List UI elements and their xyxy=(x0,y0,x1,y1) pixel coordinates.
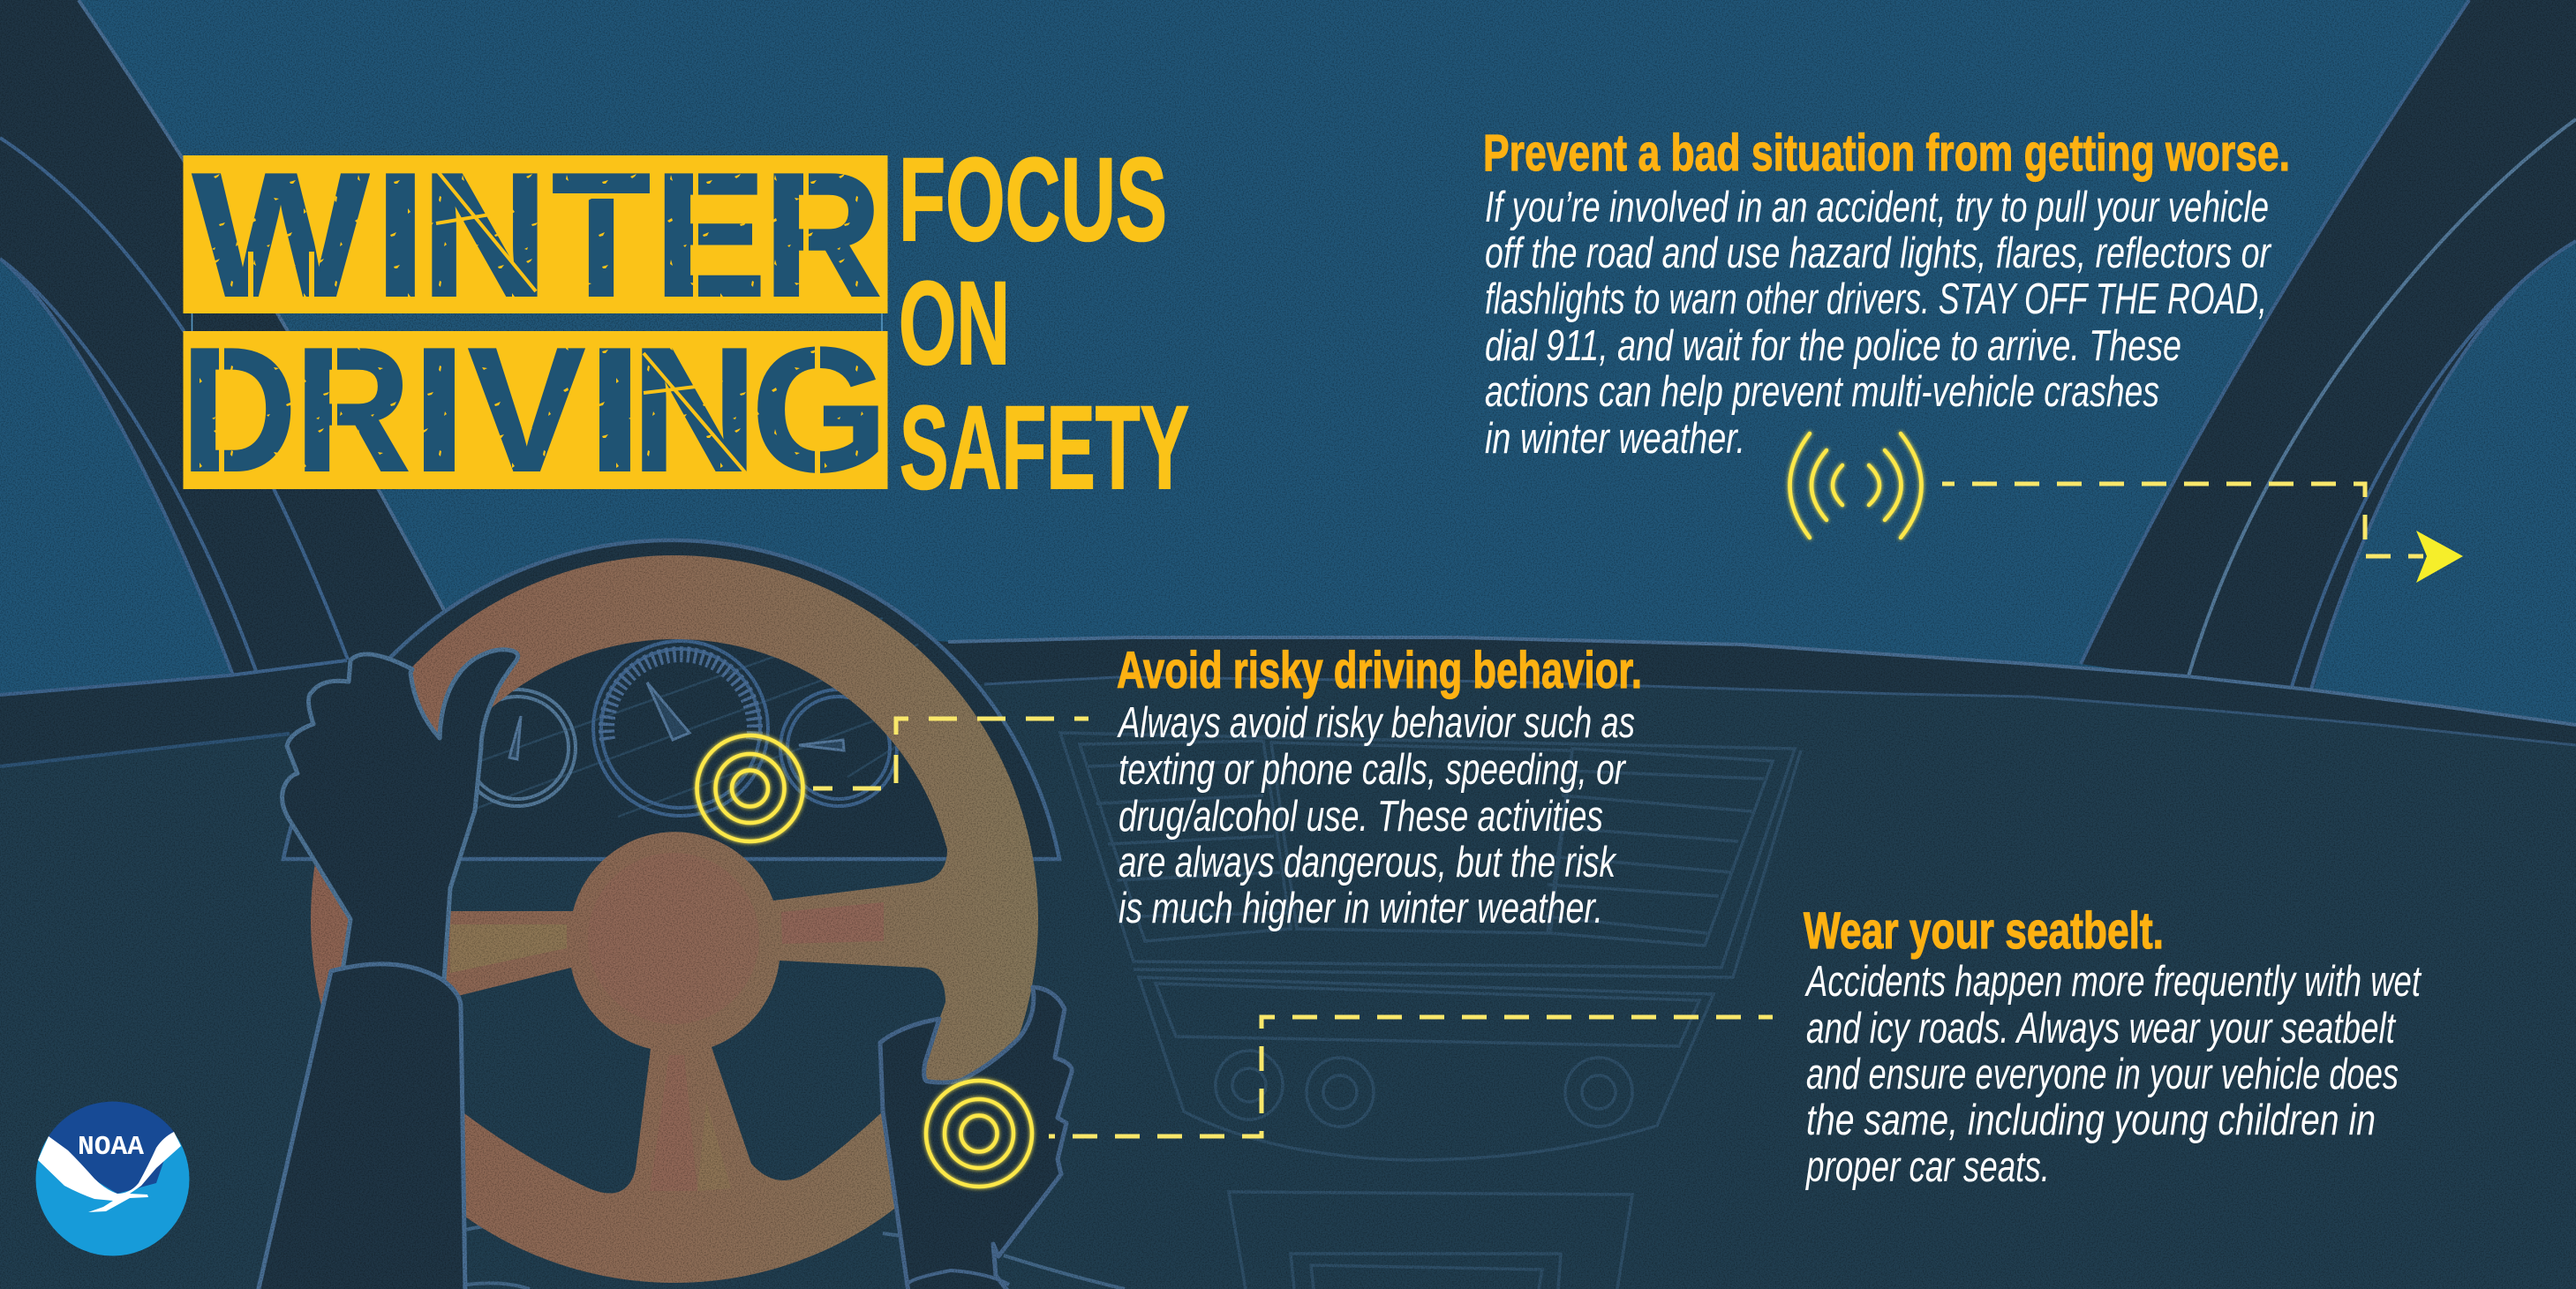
bottom spoke accent left xyxy=(650,1055,697,1191)
left hand xyxy=(282,650,518,980)
logo bird xyxy=(38,1132,181,1212)
right gauge xyxy=(780,690,897,806)
text block: wear your seatbelt xyxy=(1804,902,2422,1191)
text block: avoid risky driving behavior: drug/alcohol use. These activities xyxy=(1119,793,1603,840)
text block: wear your seatbelt: and icy roads. Always wear your seatbelt xyxy=(1806,1005,2397,1052)
title plate: WINTER: T xyxy=(552,137,651,334)
title: FOCUS ON SAFETY: SAFETY xyxy=(900,382,1189,514)
text block: wear your seatbelt: proper car seats. xyxy=(1804,1143,2050,1191)
title plate: DRIVING: I xyxy=(411,312,467,509)
panel: dashboard xyxy=(0,618,2576,1289)
text block: avoid risky driving behavior: Always avoid risky behavior such as xyxy=(1117,699,1635,747)
text block: avoid risky driving behavior: is much higher in winter weather. xyxy=(1119,885,1603,932)
arrow head xyxy=(2416,531,2463,583)
text block: avoid risky driving behavior xyxy=(1117,642,1642,932)
knob 2 xyxy=(1307,1058,1374,1127)
title plate: DRIVING: N xyxy=(631,312,757,509)
text block: prevent a bad situation: If you’re involved in an accident, try to pull your vehicle xyxy=(1485,184,2269,231)
panel: gauges xyxy=(459,618,936,817)
text block: prevent a bad situation: dial 911, and wait for the police to arrive. These xyxy=(1485,322,2181,370)
vent: center xyxy=(1271,742,1572,933)
knob 3 xyxy=(1565,1058,1632,1127)
text block: prevent a bad situation xyxy=(1483,124,2290,463)
right hand cuff xyxy=(906,1270,1009,1285)
arrow: hazard connector xyxy=(1942,484,2463,583)
bottom spoke accent right xyxy=(697,1101,731,1191)
hub accent xyxy=(588,853,759,1024)
logo wordmark: NOAA xyxy=(78,1132,144,1163)
speedometer xyxy=(593,641,768,816)
left gauge xyxy=(459,690,576,806)
title plate: WINTER: R xyxy=(764,137,882,334)
title plate: DRIVING: D xyxy=(181,312,297,509)
text block: prevent a bad situation: off the road and use hazard lights, flares, reflectors or xyxy=(1485,230,2271,277)
text block: avoid risky driving behavior: are always dangerous, but the risk xyxy=(1119,839,1617,886)
instrument hood xyxy=(283,540,1059,859)
title plate: WINTER: W xyxy=(192,137,369,334)
title: FOCUS ON SAFETY: ON xyxy=(899,258,1010,389)
icon: gauge target rings xyxy=(697,735,803,841)
left sleeve xyxy=(258,964,465,1289)
icon: hazard signal waves xyxy=(1790,433,1921,538)
right spoke accent xyxy=(781,902,884,944)
panel: left windshield pillar xyxy=(0,0,444,689)
text block: avoid risky driving behavior: texting or phone calls, speeding, or xyxy=(1119,746,1626,794)
right hand xyxy=(880,987,1072,1289)
arrow: gauge connector xyxy=(813,719,1088,788)
text block: prevent a bad situation: in winter weather. xyxy=(1485,415,1745,463)
logo: NOAA xyxy=(35,1102,189,1255)
panel: radio console xyxy=(1139,977,1714,1160)
text block: prevent a bad situation: flashlights to warn other drivers. STAY OFF THE ROAD, xyxy=(1485,275,2267,323)
title plate: WINTER: E xyxy=(654,137,766,334)
arrow: seatbelt connector xyxy=(1049,1017,1773,1136)
title: WINTER DRIVING xyxy=(181,137,888,509)
panel: right windshield pillar xyxy=(2081,0,2576,697)
panel: air vents xyxy=(1060,733,1801,977)
title plate: WINTER: N xyxy=(421,137,548,334)
title plate: DRIVING: G xyxy=(751,312,888,509)
title plate: DRIVING xyxy=(181,312,888,509)
vent: right xyxy=(1550,749,1773,946)
text block: wear your seatbelt: the same, including young children in xyxy=(1806,1097,2376,1144)
text block: prevent a bad situation: actions can help prevent multi-vehicle crashes xyxy=(1485,368,2159,416)
text block: prevent a bad situation: Prevent a bad situation from getting worse. xyxy=(1483,124,2290,182)
icon: wrist target rings xyxy=(926,1081,1032,1187)
title plate: WINTER xyxy=(184,137,888,334)
title plate: WINTER: I xyxy=(374,137,426,334)
title: FOCUS ON SAFETY: FOCUS xyxy=(899,134,1167,266)
knob 1 xyxy=(1216,1051,1283,1119)
panel: lower console xyxy=(1229,1192,1632,1289)
text block: avoid risky driving behavior: Avoid risky driving behavior. xyxy=(1117,642,1642,699)
text block: wear your seatbelt: Wear your seatbelt. xyxy=(1804,902,2164,960)
title plate: DRIVING: R xyxy=(295,312,411,509)
title plate: DRIVING: V xyxy=(468,312,585,509)
steering wheel xyxy=(311,555,1038,1283)
title: FOCUS ON SAFETY xyxy=(899,134,1189,514)
vent slats xyxy=(1088,761,1764,933)
vent: left xyxy=(1080,741,1291,941)
left spoke accent xyxy=(450,924,567,973)
title plate: DRIVING: I xyxy=(587,312,643,509)
